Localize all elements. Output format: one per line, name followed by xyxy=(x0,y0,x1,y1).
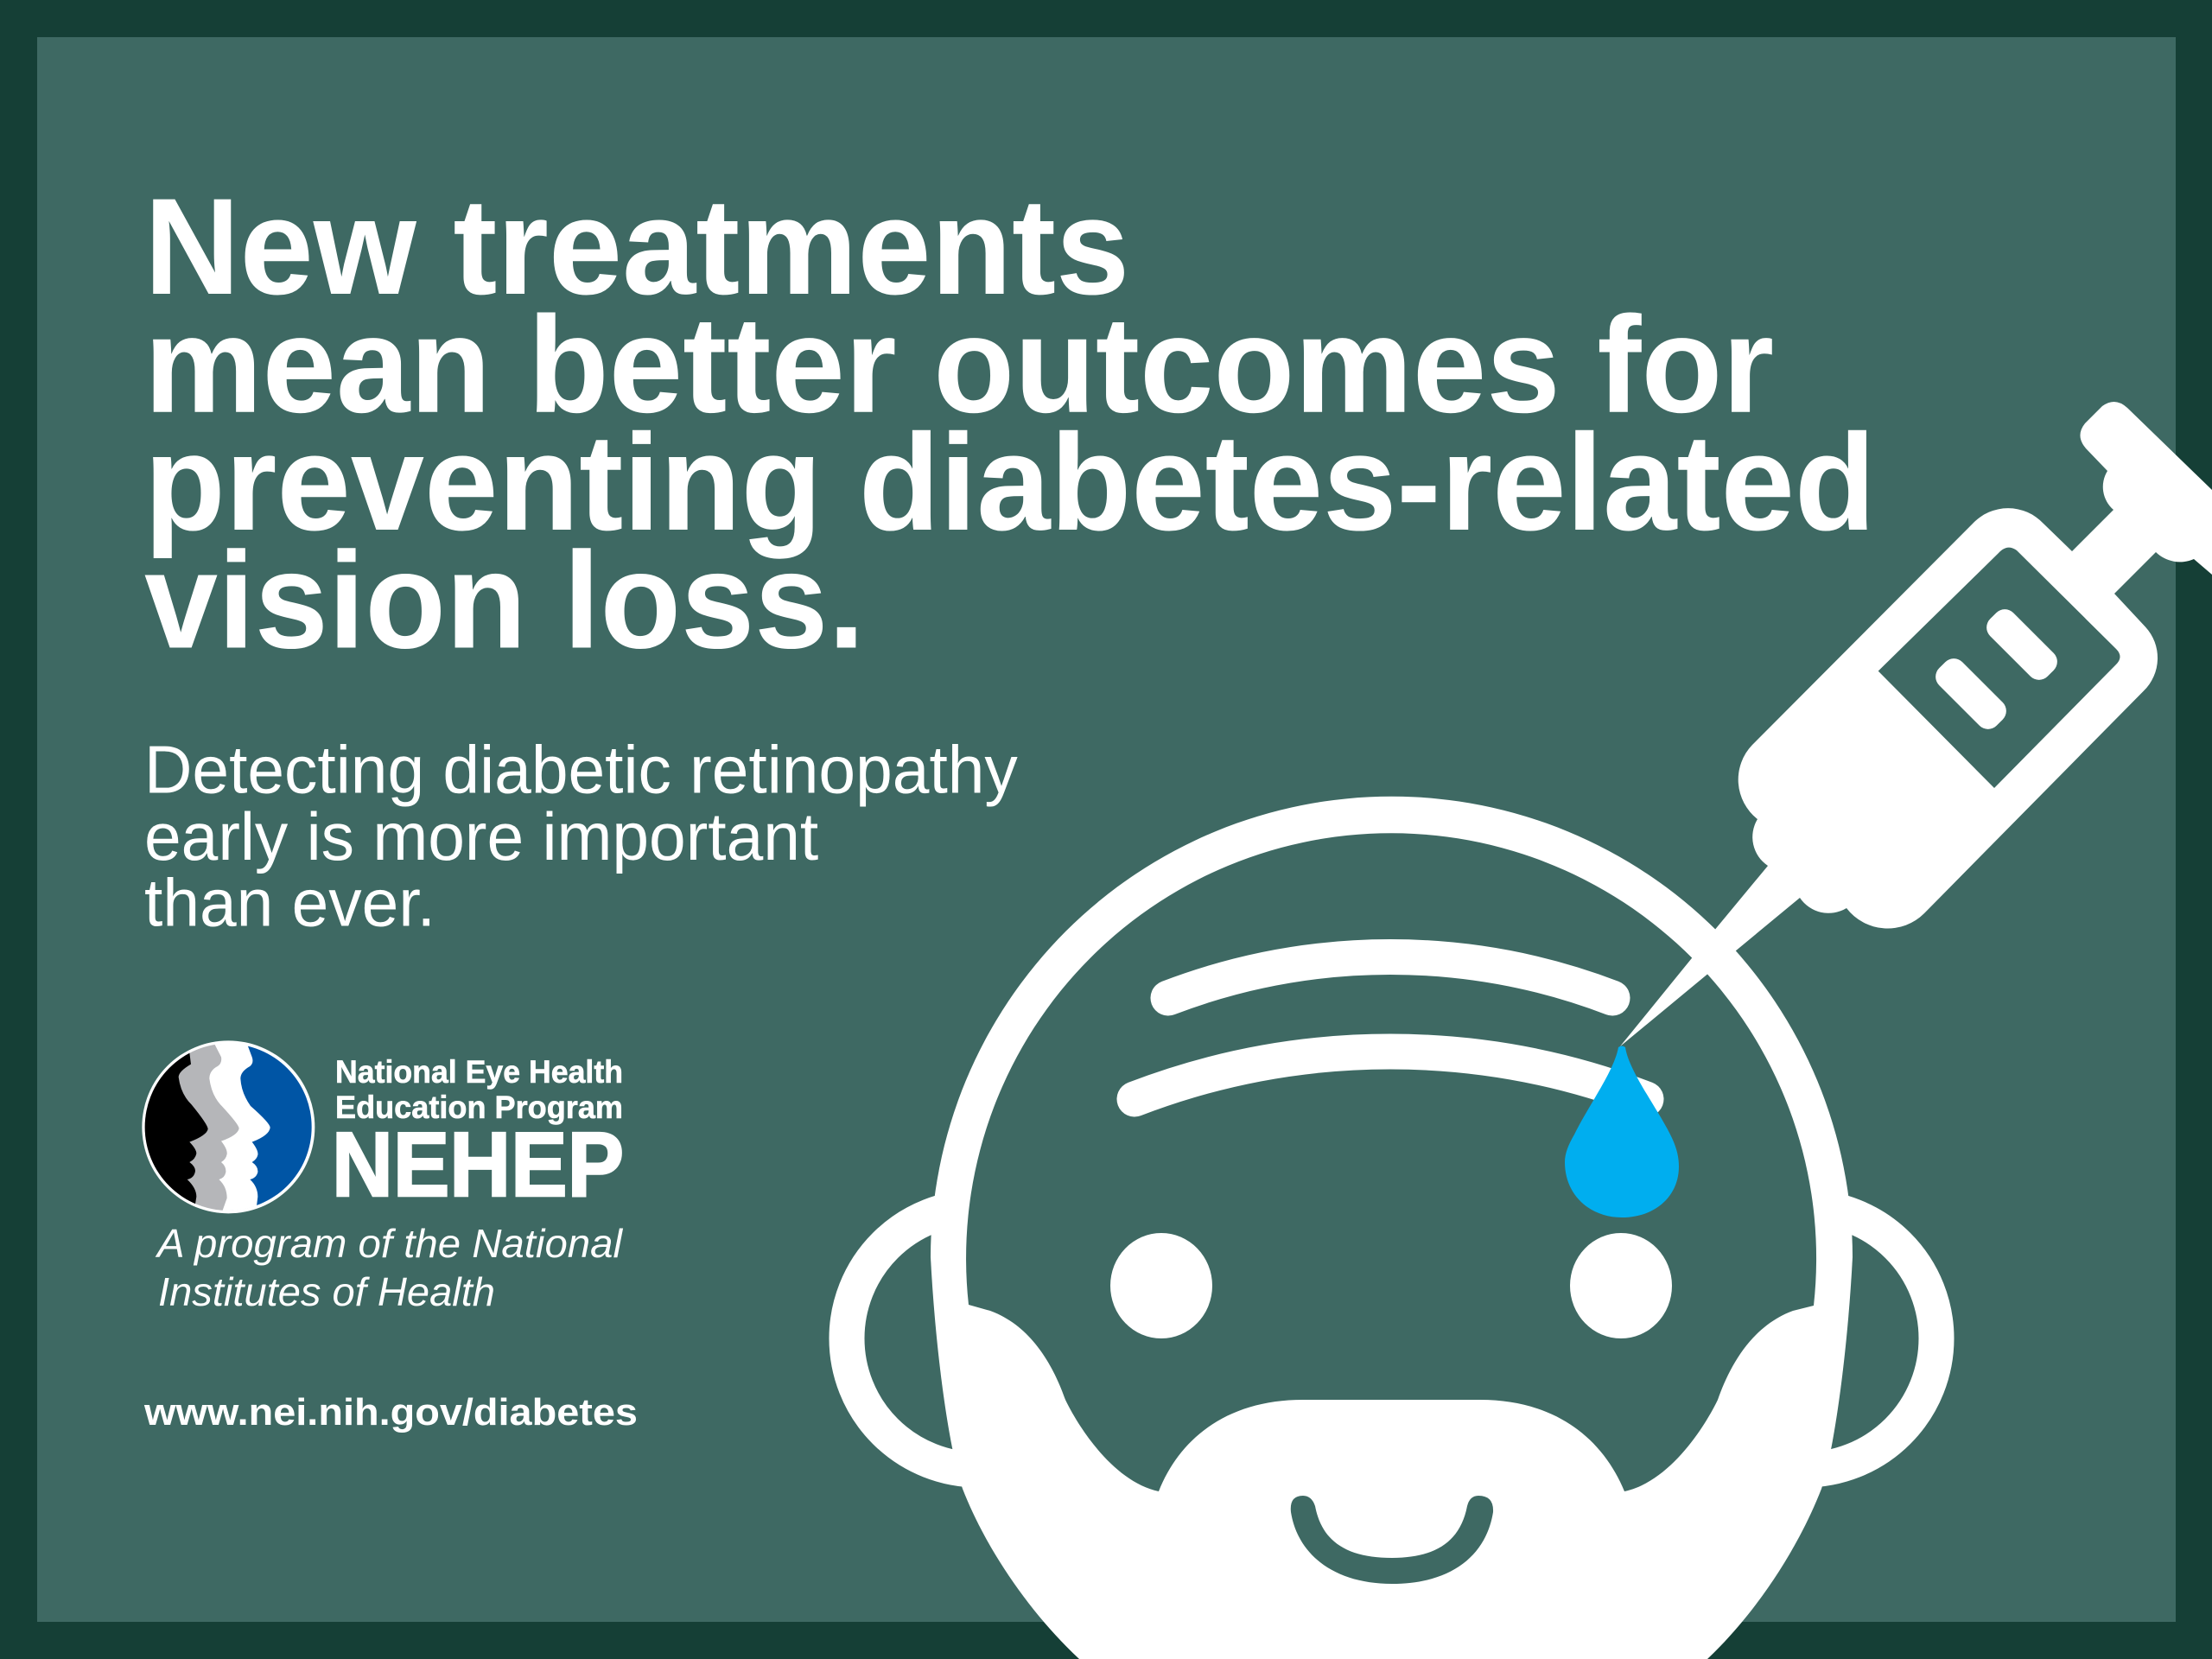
head and beard silhouette xyxy=(931,797,1853,1659)
icon: NEHEP faces emblem xyxy=(142,1040,315,1213)
title: vision loss. xyxy=(144,524,865,677)
logo text: National Eye Health xyxy=(335,1053,623,1090)
face opening xyxy=(966,833,1816,1491)
icon: blue drop xyxy=(1565,1046,1679,1217)
icon: syringe xyxy=(1620,402,2212,1046)
tagline: Institutes of Health xyxy=(158,1269,495,1314)
syringe body xyxy=(1620,402,2212,1046)
subheading: than ever. xyxy=(144,866,435,941)
title: New treatments xyxy=(144,170,1129,324)
website url: www.nei.nih.gov/diabetes xyxy=(143,1391,638,1433)
subheading: early is more important xyxy=(144,800,818,874)
title: preventing diabetes-related xyxy=(144,407,1876,560)
illustration: smiling face xyxy=(847,797,1936,1659)
syringe dose marks xyxy=(1930,604,2063,734)
logo text: Education Program xyxy=(335,1089,623,1125)
syringe window xyxy=(1878,548,2120,788)
eyes xyxy=(1110,1233,1672,1338)
logo text: NEHEP xyxy=(332,1114,624,1216)
title: mean better outcomes for xyxy=(144,288,1774,442)
subheading xyxy=(144,733,1018,941)
smile xyxy=(1291,1496,1493,1584)
subheading: Detecting diabetic retinopathy xyxy=(144,733,1018,808)
tagline xyxy=(155,1221,624,1314)
logo: NEHEP xyxy=(130,1028,624,1314)
icon: ears xyxy=(847,1207,1936,1470)
eyebrows xyxy=(1135,957,1646,1099)
logo text xyxy=(332,1053,624,1216)
title xyxy=(144,170,1876,677)
tagline: A program of the National xyxy=(155,1221,624,1266)
